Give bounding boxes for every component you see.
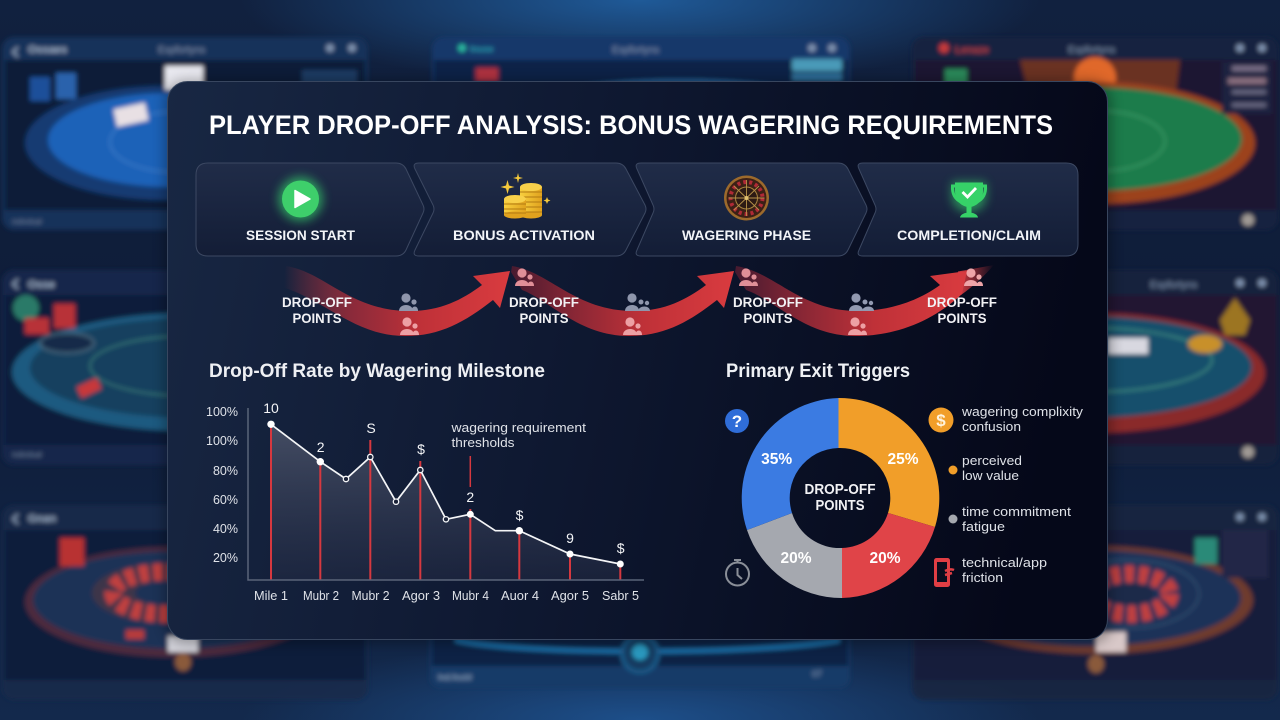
annotation: wagering requirement thresholds: wagering requirement xyxy=(450,420,586,435)
legend text: friction xyxy=(962,570,1003,585)
panel: blurred roulette screen, bottom left: Gnan xyxy=(28,513,56,525)
centre label: DROP-OFF xyxy=(804,482,876,498)
legend text: technical/app xyxy=(962,555,1047,570)
point labels: $ xyxy=(417,441,425,457)
y axis labels xyxy=(206,405,238,565)
labels: drop-off points: DROP-OFF xyxy=(927,295,997,310)
point labels: 9 xyxy=(566,530,574,546)
panel: main analysis card xyxy=(168,82,1108,640)
segment values xyxy=(761,451,919,567)
panel: blurred teal table screen, middle left xyxy=(2,270,368,465)
panel: blurred roulette screen, bottom left xyxy=(2,505,368,700)
x axis labels: Agor 5 xyxy=(551,589,589,603)
point labels: $ xyxy=(516,507,524,523)
x axis labels: Sabr 5 xyxy=(602,589,639,603)
x axis labels: Mubr 2 xyxy=(352,589,390,603)
arrow tip fade xyxy=(958,265,994,295)
point labels: $ xyxy=(617,540,625,556)
chart area fill xyxy=(271,424,620,580)
process flow xyxy=(196,163,1078,256)
y axis labels: 40% xyxy=(213,522,238,536)
centre label xyxy=(804,482,876,514)
arrow: ribbon two xyxy=(511,266,734,336)
panel: blurred blue screen, bottom centre: Ind.fould xyxy=(438,673,472,682)
icon: trophy xyxy=(952,182,986,218)
heading: line chart: Drop-Off Rate by Wagering Milestone xyxy=(209,361,545,382)
icon: dollar coin: $ xyxy=(936,411,946,430)
panel: blurred teal table screen, top centre xyxy=(432,37,850,100)
x axis labels: Mubr 2 xyxy=(303,589,339,603)
icon: coin stacks xyxy=(500,173,550,218)
y axis labels: 80% xyxy=(213,464,238,478)
panel: blurred teal table screen, middle right xyxy=(912,270,1278,465)
label: wagering phase: WAGERING PHASE xyxy=(682,227,811,243)
x axis labels: Agor 3 xyxy=(402,589,440,603)
labels: drop-off points: POINTS xyxy=(938,311,986,326)
title: PLAYER DROP-OFF ANALYSIS: BONUS WAGERING REQUIREMENTS xyxy=(209,110,1053,140)
y axis labels: 60% xyxy=(213,493,238,507)
axes xyxy=(248,408,644,580)
panel: blurred teal table screen, top centre: Inuse xyxy=(470,44,494,54)
panel: blurred green table screen, top right xyxy=(912,37,1278,230)
x axis labels: Mile 1 xyxy=(254,589,288,603)
labels: drop-off points xyxy=(282,295,997,326)
panel: blurred blue screen, bottom centre: 07 xyxy=(812,669,822,679)
segment: orange 25% xyxy=(838,398,939,527)
labels: drop-off points: DROP-OFF xyxy=(282,295,352,310)
legend dot: orange xyxy=(948,466,958,474)
x axis labels: Mubr 4 xyxy=(452,589,489,603)
legend text: perceived xyxy=(962,453,1022,468)
arrow: ribbon one xyxy=(282,266,510,336)
labels: drop-off points: DROP-OFF xyxy=(509,295,579,310)
panel: blurred roulette screen, bottom right xyxy=(912,505,1278,700)
data line xyxy=(271,424,620,564)
legend text: wagering complixity xyxy=(961,404,1084,419)
drop-off ribbon arrows xyxy=(282,265,997,336)
arrow: ribbon three xyxy=(735,266,967,336)
icon: dollar coin xyxy=(928,408,954,432)
step: wagering phase xyxy=(636,163,867,256)
y axis labels: 20% xyxy=(213,551,238,565)
panel: blurred blue table screen, top left xyxy=(2,37,368,230)
panel: blurred blue screen, bottom centre xyxy=(430,630,850,688)
segment values: 20% xyxy=(780,550,812,567)
annotation: wagering requirement thresholds: thresholds xyxy=(452,435,515,450)
labels: drop-off points: DROP-OFF xyxy=(733,295,803,310)
centre label: POINTS xyxy=(816,498,865,514)
icon: question mark xyxy=(725,409,749,433)
labels: drop-off points: POINTS xyxy=(520,311,568,326)
icon: people group markers xyxy=(399,268,983,335)
threshold lines xyxy=(271,424,620,580)
step: bonus activation xyxy=(414,163,646,256)
legend text: confusion xyxy=(962,419,1021,434)
x axis labels xyxy=(254,589,639,603)
y axis labels: 100% xyxy=(206,434,238,448)
point labels: 10 xyxy=(263,400,279,416)
y axis labels: 100% xyxy=(206,405,238,419)
panel: blurred blue table screen, top left: Individual xyxy=(12,219,42,226)
labels: drop-off points: POINTS xyxy=(744,311,792,326)
panel: blurred blue table screen, top left: Ossaes xyxy=(28,44,67,56)
legend text: fatigue xyxy=(962,519,1005,534)
segment values: 25% xyxy=(887,451,919,468)
heading: donut chart: Primary Exit Triggers xyxy=(726,361,910,382)
panel: blurred teal table screen, middle left: Osse xyxy=(28,279,55,291)
segment: blue 35% xyxy=(742,398,838,530)
label: completion/claim: COMPLETION/CLAIM xyxy=(897,227,1041,243)
panel: blurred blue table screen, top left: Espfortyns xyxy=(158,45,205,56)
segment: red 20% xyxy=(842,513,935,598)
panel: blurred teal table screen, top centre: Espfortyns xyxy=(612,45,659,56)
donut chart xyxy=(742,398,939,598)
icon: stopwatch xyxy=(726,560,749,586)
annotation: wagering requirement thresholds xyxy=(450,420,586,450)
label: bonus activation: BONUS ACTIVATION xyxy=(453,227,595,243)
segment values: 35% xyxy=(761,451,792,468)
point labels: 2 xyxy=(317,439,325,455)
data markers xyxy=(267,421,624,568)
x axis labels: Auor 4 xyxy=(501,589,539,603)
icon: question mark: ? xyxy=(732,412,742,431)
panel: blurred teal table screen, middle right: Espfortyns xyxy=(1150,280,1197,291)
legend text: low value xyxy=(962,468,1019,483)
panel: blurred green table screen, top right: Espfortyns xyxy=(1068,45,1115,56)
legend text: time commitment xyxy=(962,504,1071,519)
panel: blurred green table screen, top right: Lenaze xyxy=(955,45,989,56)
panel shadow xyxy=(164,80,1112,644)
step: completion/claim xyxy=(858,163,1078,256)
panel: blurred teal table screen, middle left: Individual xyxy=(12,452,42,459)
point labels: S xyxy=(366,420,376,436)
point labels xyxy=(263,400,625,556)
icon: play button xyxy=(278,177,322,221)
step: session start xyxy=(196,163,424,256)
segment values: 20% xyxy=(869,550,901,567)
icon: phone friction xyxy=(934,558,954,587)
label: session start: SESSION START xyxy=(246,227,355,243)
icon: roulette wheel xyxy=(724,176,769,220)
point labels: 2 xyxy=(466,489,474,505)
segment: grey 20% xyxy=(747,513,842,598)
legend dot: grey xyxy=(948,514,958,524)
legend text xyxy=(961,404,1084,585)
labels: drop-off points: POINTS xyxy=(292,311,342,326)
line chart xyxy=(206,400,644,603)
